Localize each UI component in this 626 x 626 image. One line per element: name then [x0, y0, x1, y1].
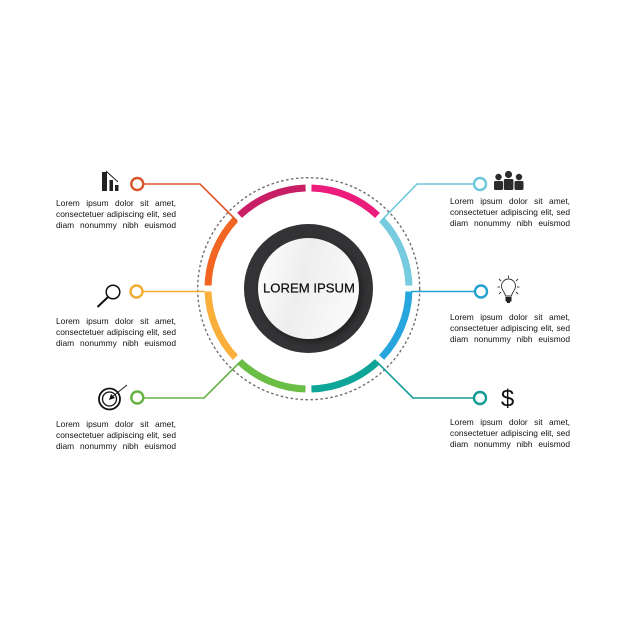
icon: bar chart — [102, 171, 118, 191]
connector: blue — [411, 286, 487, 298]
text block: left 3: consectetuer adipiscing elit, sed — [56, 430, 176, 440]
text block: left 2: consectetuer adipiscing elit, sed — [56, 327, 176, 337]
icon: dollar sign: $ — [501, 386, 514, 412]
centre hub — [244, 224, 373, 353]
connector: teal — [377, 362, 486, 404]
text block: left 2: diam nonummy nibh euismod — [56, 338, 176, 348]
connector: yellow — [130, 286, 205, 298]
connector: green — [131, 362, 240, 404]
hub title: LOREM IPSUM — [263, 280, 355, 296]
text block: right 2: diam nonummy nibh euismod — [450, 334, 570, 344]
text block: left 3: diam nonummy nibh euismod — [56, 441, 176, 451]
text block: right 1: consectetuer adipiscing elit, sed — [450, 207, 570, 217]
text block: right 3: consectetuer adipiscing elit, sed — [450, 428, 570, 438]
icon: people — [494, 171, 524, 190]
text block: right 3: Lorem ipsum dolor sit amet, — [450, 417, 570, 427]
text block: right 3 — [450, 417, 570, 449]
connector: light blue — [381, 178, 486, 221]
text block: left 1: consectetuer adipiscing elit, sed — [56, 209, 176, 219]
text block: left 3: Lorem ipsum dolor sit amet, — [56, 419, 176, 429]
dashed outer ring — [198, 178, 420, 400]
segmented colour ring — [166, 146, 451, 431]
text block: right 3: diam nonummy nibh euismod — [450, 439, 570, 449]
icon: magnifier — [98, 285, 120, 307]
text block: left 1 — [56, 198, 176, 230]
icon: target — [99, 385, 127, 410]
text block: left 3 — [56, 419, 176, 451]
text block: right 2 — [450, 312, 570, 344]
text block: right 2: consectetuer adipiscing elit, sed — [450, 323, 570, 333]
connector: orange — [131, 178, 237, 221]
icon: light bulb — [498, 276, 520, 303]
text block: right 1 — [450, 196, 570, 228]
text block: right 1: Lorem ipsum dolor sit amet, — [450, 196, 570, 206]
text block: left 2 — [56, 316, 176, 348]
text block: left 2: Lorem ipsum dolor sit amet, — [56, 316, 176, 326]
text block: right 1: diam nonummy nibh euismod — [450, 218, 570, 228]
text block: right 2: Lorem ipsum dolor sit amet, — [450, 312, 570, 322]
text block: left 1: diam nonummy nibh euismod — [56, 220, 176, 230]
text block: left 1: Lorem ipsum dolor sit amet, — [56, 198, 176, 208]
